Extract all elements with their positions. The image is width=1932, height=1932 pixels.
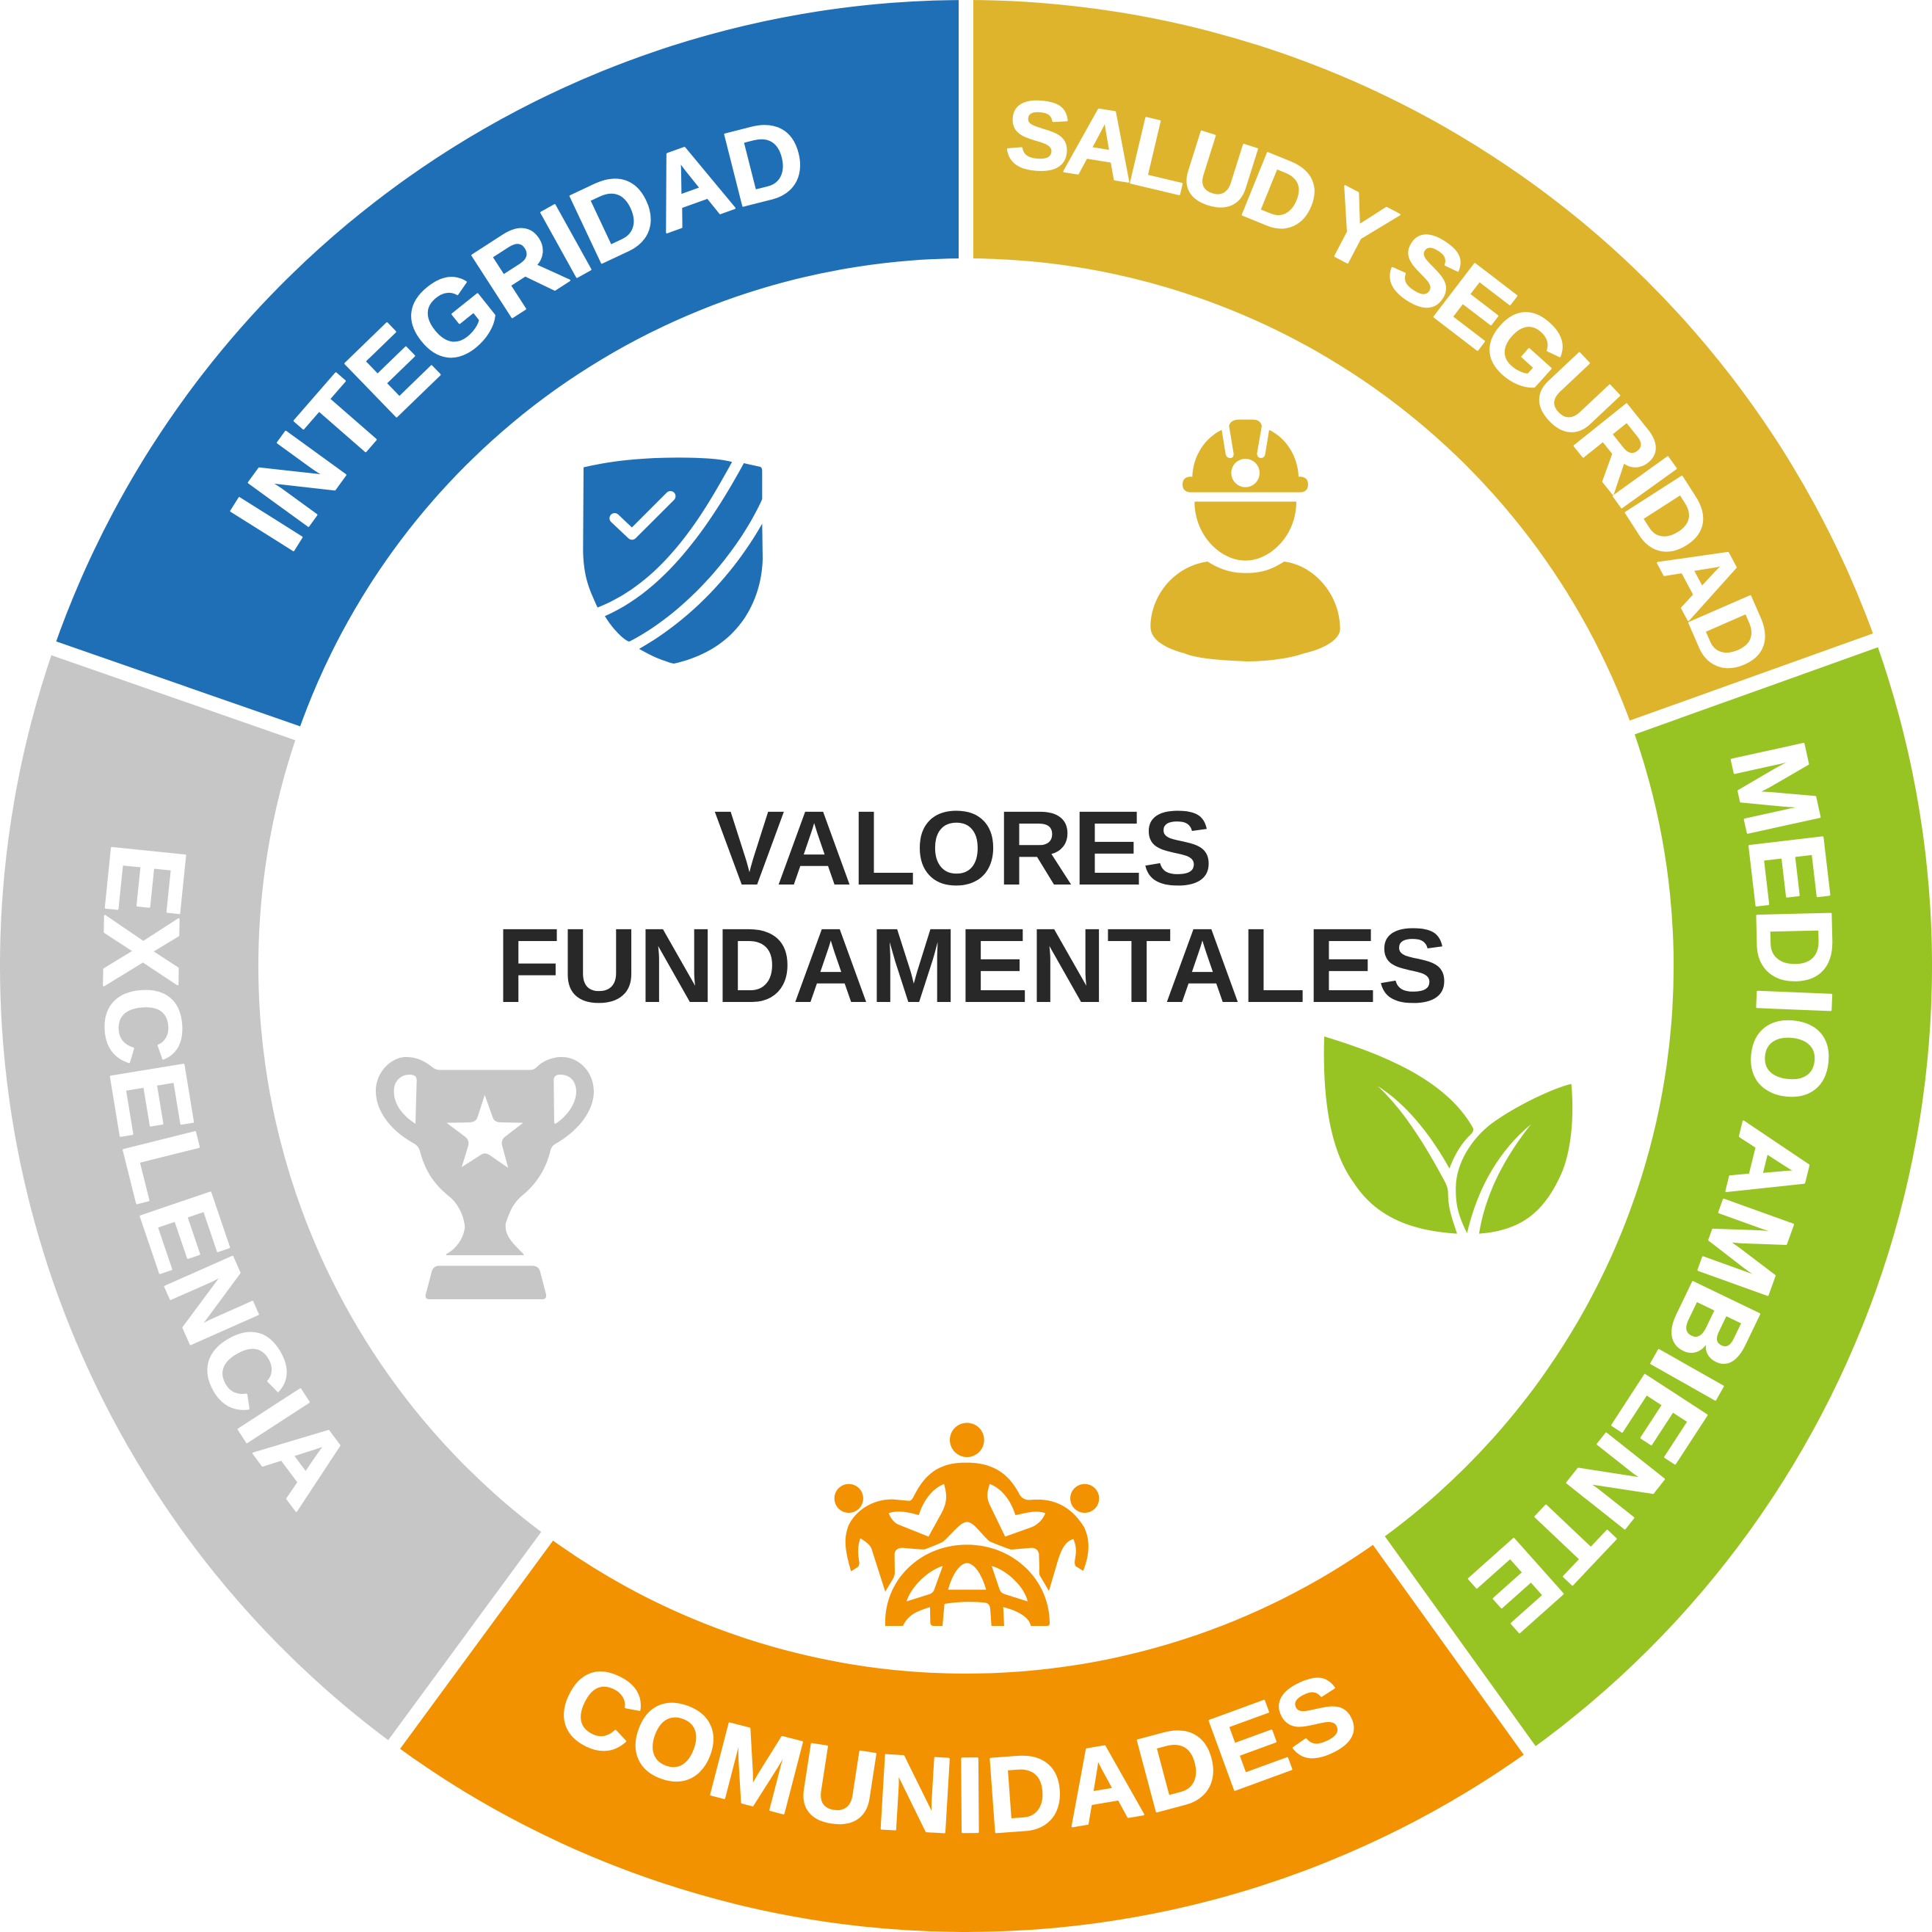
ring segment: integridad: [54, 0, 966, 733]
icon: community of people: [835, 1423, 1099, 1626]
label: medio ambiente: MEDIO AMBIENTE: [1468, 743, 1832, 1634]
ring segment: salud y seguridad: [966, 0, 1875, 727]
panel: excelencia: [0, 655, 594, 1740]
label: comunidades: COMUNIDADES: [564, 1671, 1354, 1834]
icon: trophy with star: [376, 1057, 594, 1299]
icon: worker with hard hat: [1150, 420, 1340, 661]
title: valores fundamentales: FUNDAMENTALES: [496, 907, 1449, 1025]
title: valores fundamentales: [496, 789, 1449, 1025]
label: salud y seguridad: SALUD Y SEGURIDAD: [1007, 100, 1765, 668]
panel: medio ambiente: [1324, 647, 1932, 1746]
panel: integridad: [56, 0, 959, 727]
ring segment: excelencia: [0, 648, 547, 1745]
title: valores fundamentales: VALORES: [714, 789, 1212, 907]
icon: shield with check: [583, 457, 763, 664]
label: integridad: INTEGRIDAD: [230, 125, 800, 551]
label: excelencia: EXCELENCIA: [103, 847, 341, 1512]
panel: salud y seguridad: [973, 0, 1873, 721]
panel: comunidades: [400, 1423, 1536, 1932]
ring segment: medio ambiente: [1379, 640, 1932, 1751]
icon: leaves: [1324, 1036, 1572, 1234]
ring segment: comunidades: [394, 1536, 1530, 1932]
